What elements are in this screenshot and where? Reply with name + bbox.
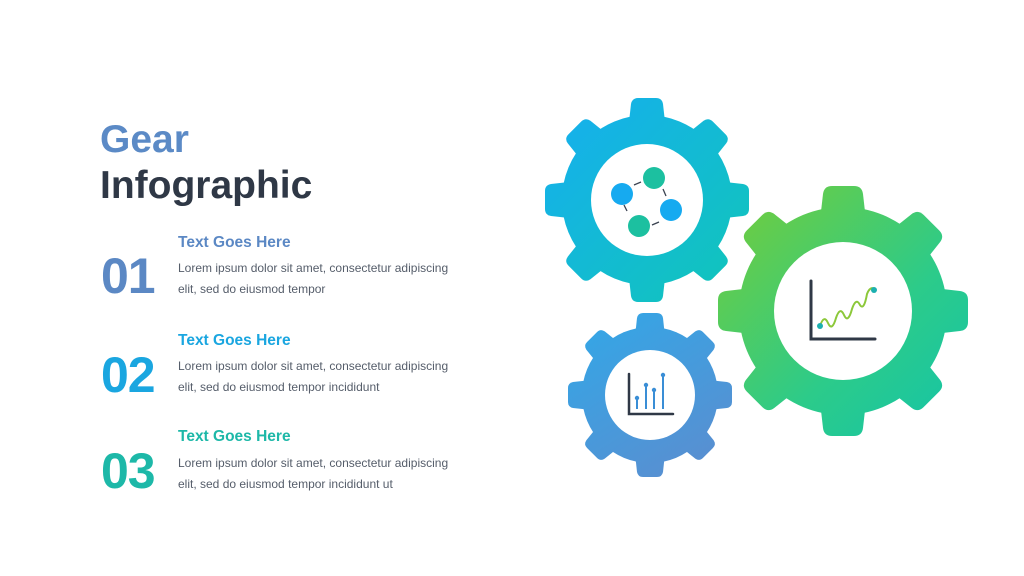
gear 2: bar chart bbox=[568, 313, 732, 477]
item 03 bbox=[101, 428, 448, 499]
heading 02: Text Goes Here bbox=[178, 332, 291, 349]
gear 3: growth chart bbox=[718, 186, 968, 436]
item 01 bbox=[101, 234, 448, 304]
heading 03: Text Goes Here bbox=[178, 428, 291, 445]
gears bbox=[545, 98, 968, 477]
body 02: Lorem ipsum dolor sit amet, consectetur adipiscing elit, sed do eiusmod tempor incididunt bbox=[178, 359, 448, 394]
number 01: 01 bbox=[101, 248, 155, 304]
title line 1: Gear bbox=[100, 118, 189, 161]
title line 2: Infographic bbox=[100, 164, 312, 207]
gear 1: cycle bbox=[540, 93, 755, 308]
number 03: 03 bbox=[101, 443, 155, 499]
title bbox=[100, 118, 312, 207]
item 02 bbox=[101, 332, 448, 403]
heading 01: Text Goes Here bbox=[178, 234, 291, 251]
body 01: Lorem ipsum dolor sit amet, consectetur adipiscing elit, sed do eiusmod tempor bbox=[178, 261, 448, 296]
icon: bar chart bbox=[629, 373, 673, 414]
icon: cycle bbox=[611, 167, 682, 237]
icon: growth chart bbox=[811, 281, 877, 339]
body 03: Lorem ipsum dolor sit amet, consectetur adipiscing elit, sed do eiusmod tempor incididunt ut bbox=[178, 456, 448, 491]
number 02: 02 bbox=[101, 347, 155, 403]
